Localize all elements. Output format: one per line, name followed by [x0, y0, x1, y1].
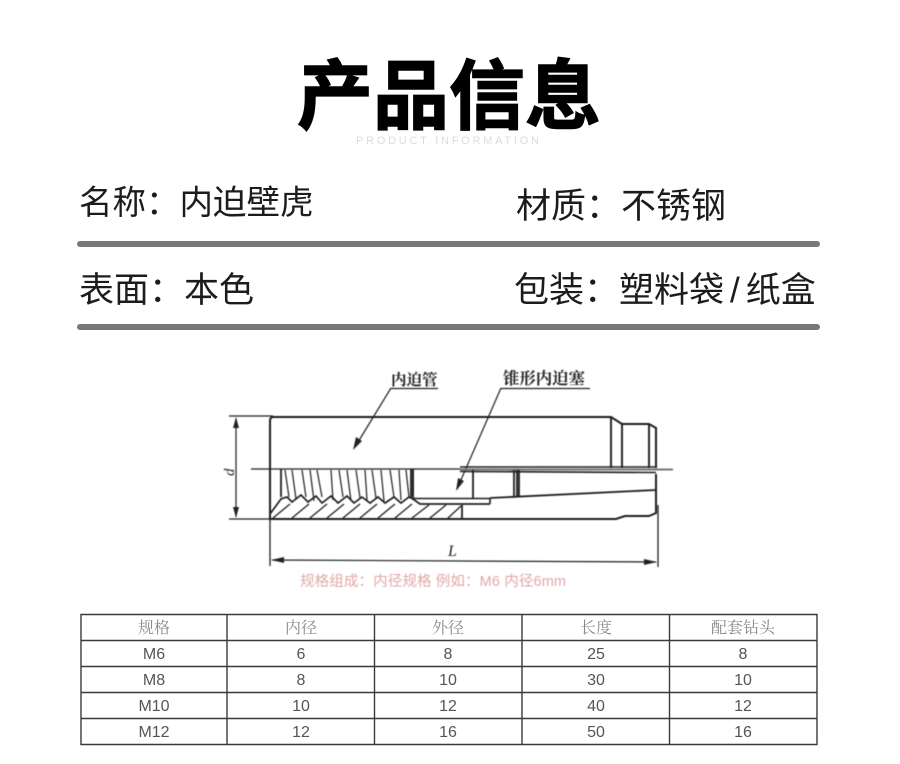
table header: 规格 — [138, 619, 170, 637]
row M10: 10 — [292, 698, 310, 715]
row M8: 10 — [439, 672, 457, 689]
dimension d: d — [222, 468, 238, 476]
table header: 配套钻头 — [711, 619, 776, 637]
table header: 长度 — [580, 619, 612, 637]
row M8: M8 — [143, 672, 165, 689]
row M12: 12 — [292, 724, 310, 741]
divider bar two — [77, 324, 820, 330]
dimension d — [222, 416, 273, 519]
row M8: 30 — [587, 672, 605, 689]
table header: 外径 — [432, 619, 464, 637]
row M6: 8 — [739, 646, 748, 663]
row M6 — [143, 646, 748, 663]
divider bar one — [77, 241, 820, 247]
subtitle: PRODUCT INFORMATION — [356, 135, 542, 147]
row M8 — [143, 672, 752, 689]
row M8: 8 — [297, 672, 306, 689]
row M12: M12 — [138, 724, 170, 741]
row M12: 50 — [587, 724, 605, 741]
spec: material: 材质：不锈钢 — [516, 187, 726, 226]
row M8: 10 — [734, 672, 752, 689]
dimension L: L — [447, 543, 457, 560]
row M10: 40 — [587, 698, 605, 715]
spec: surface: 表面：本色 — [79, 271, 254, 310]
row M6: 25 — [587, 646, 605, 663]
spec: name: 名称：内迫壁虎 — [79, 185, 314, 222]
arrow: cone plug — [456, 388, 501, 491]
row M12 — [138, 724, 752, 741]
internal thread — [285, 470, 409, 501]
spec: packaging: 包装：塑料袋/纸盒 — [514, 271, 816, 310]
title: 产品信息 — [297, 55, 601, 140]
fastener drawing — [251, 417, 673, 519]
row M6: 8 — [444, 646, 453, 663]
diagram note: 规格组成：内径规格 例如：M6 内径6mm — [300, 573, 566, 590]
cone plug body — [473, 470, 519, 498]
row M10: M10 — [138, 698, 170, 715]
row M12: 16 — [734, 724, 752, 741]
row M10: 12 — [734, 698, 752, 715]
row M12: 16 — [439, 724, 457, 741]
row M10: 12 — [439, 698, 457, 715]
table grid — [81, 614, 817, 744]
table header — [138, 619, 776, 637]
arrow: inner tube — [353, 388, 391, 450]
dimension L — [270, 505, 658, 567]
table header: 内径 — [285, 619, 317, 637]
hatching — [273, 504, 461, 518]
row M6: 6 — [297, 646, 306, 663]
row M6: M6 — [143, 646, 165, 663]
row M10 — [138, 698, 752, 715]
label: cone plug: 锥形内迫塞 — [503, 369, 585, 388]
label: inner tube: 内迫管 — [391, 370, 438, 389]
